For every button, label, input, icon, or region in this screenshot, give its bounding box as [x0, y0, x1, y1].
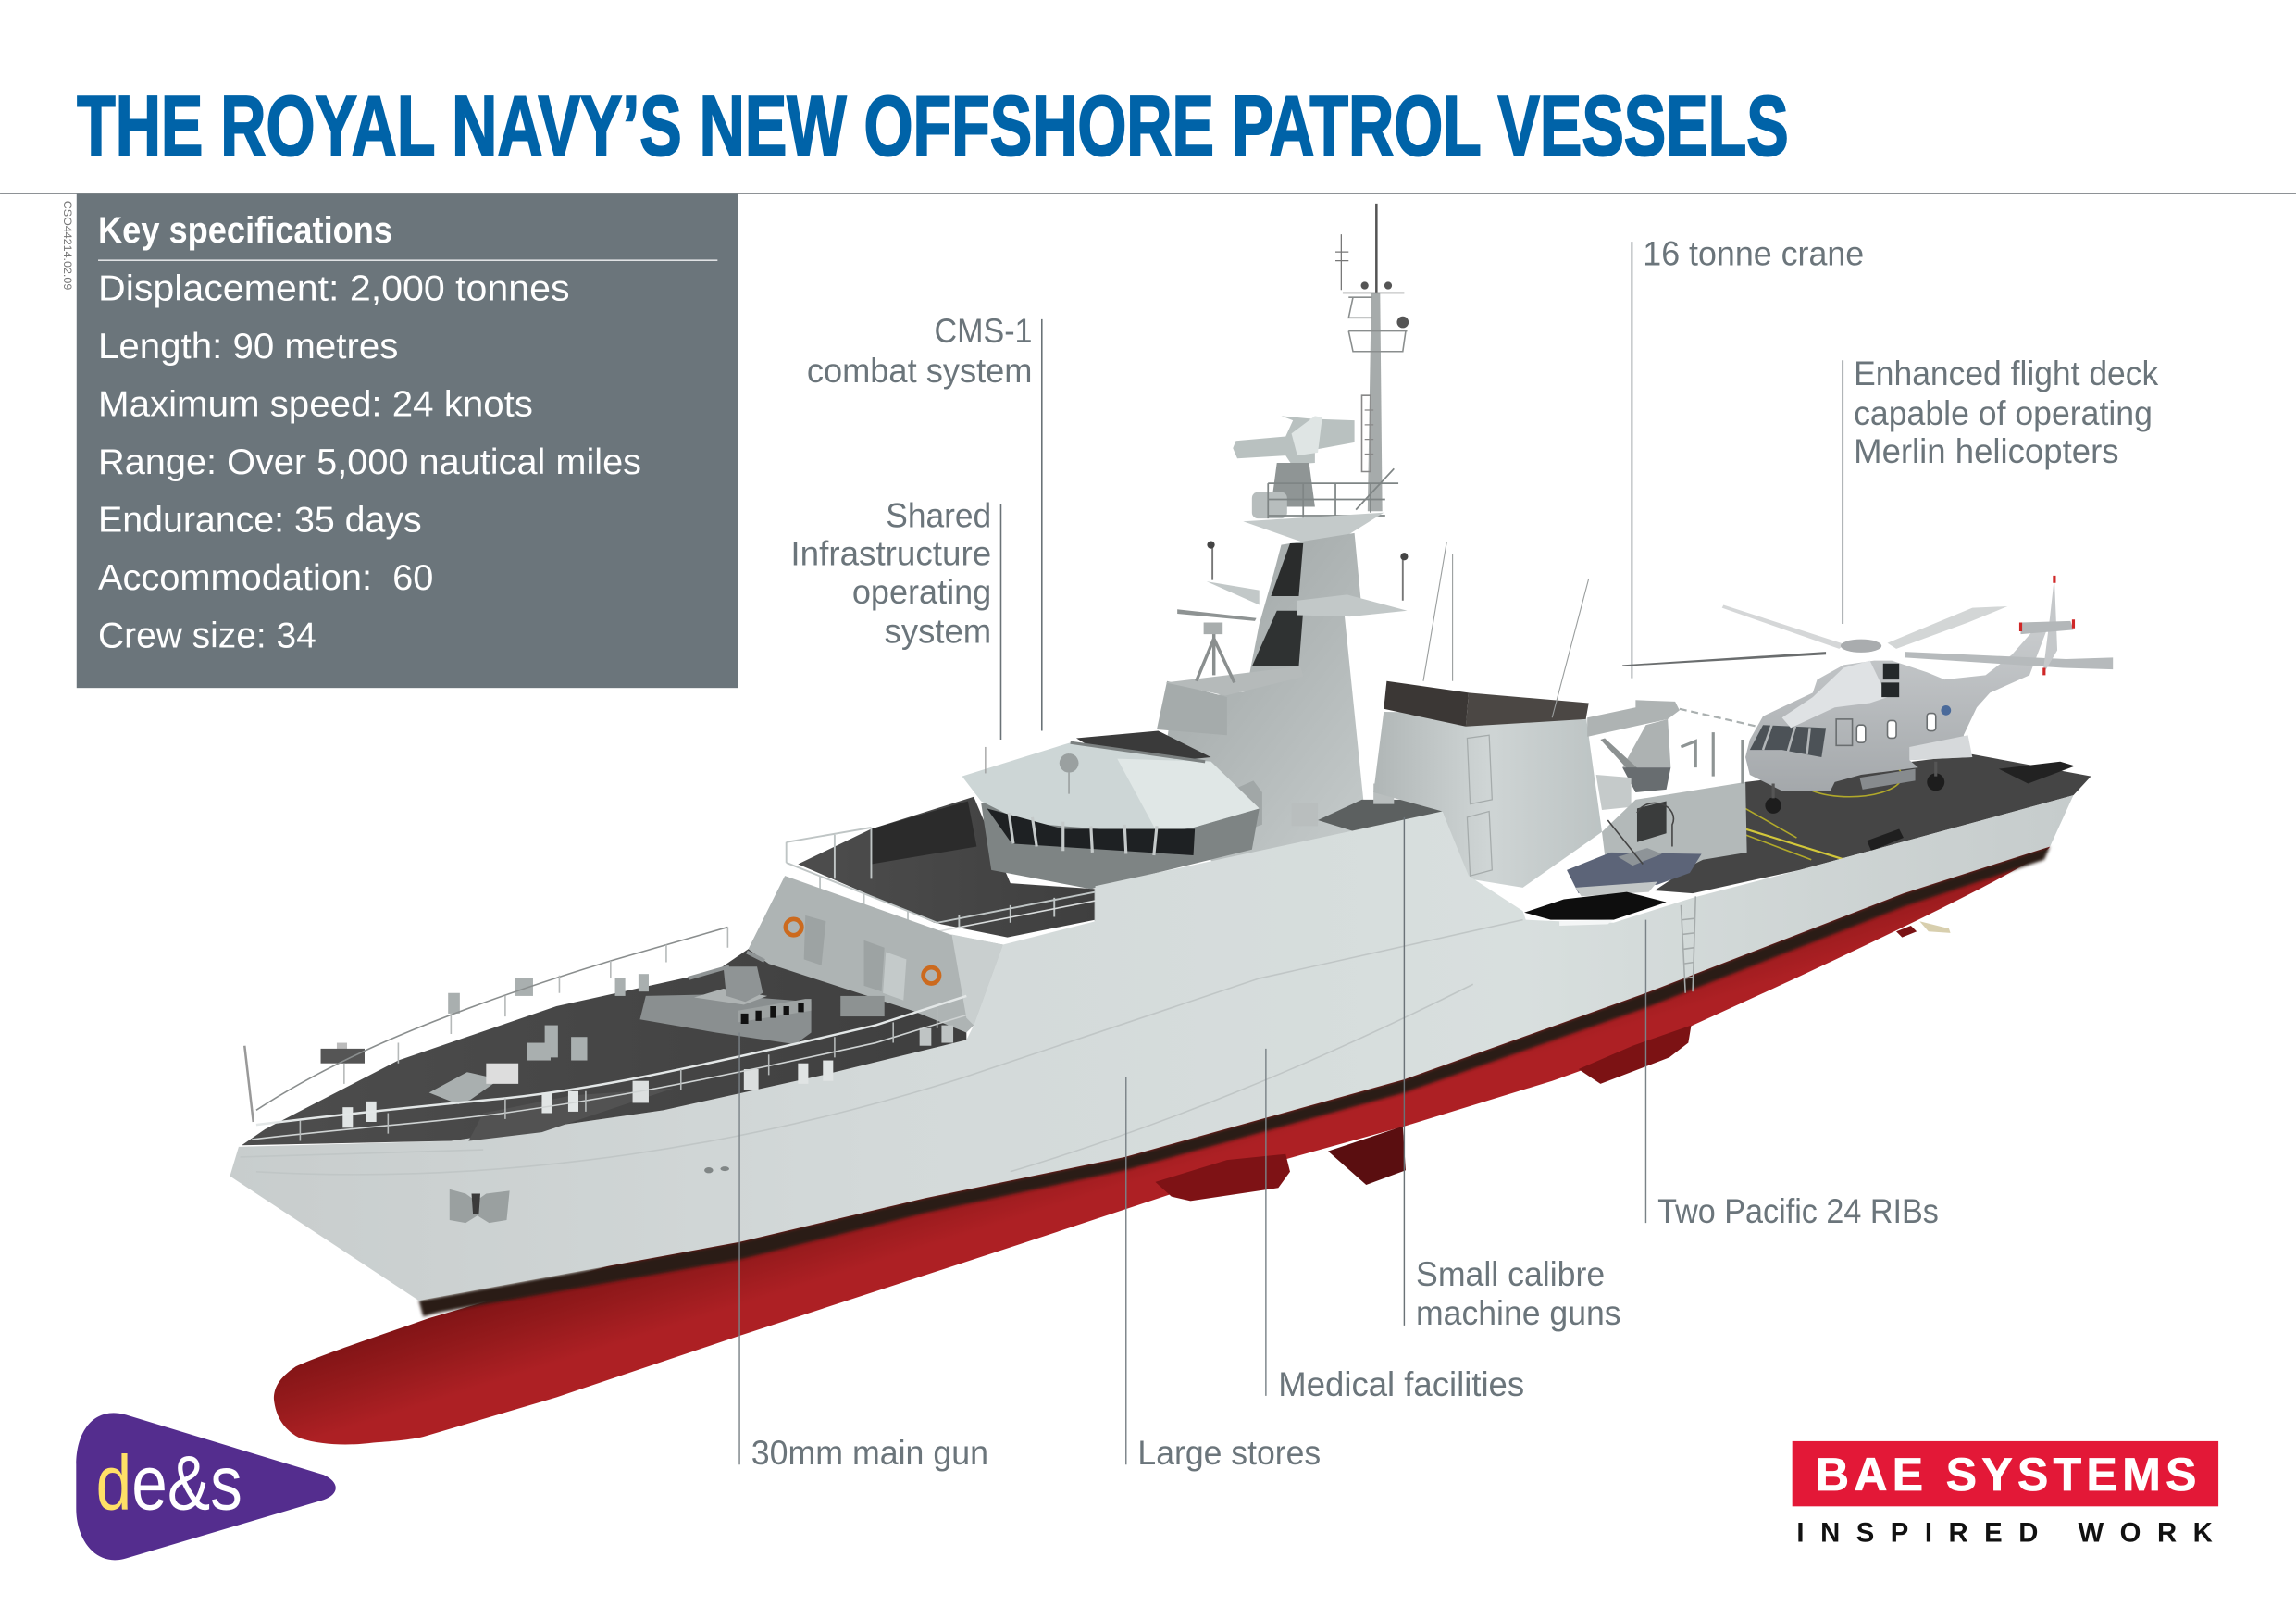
specifications heading: Key specifications — [98, 210, 392, 251]
spec list — [98, 268, 641, 655]
leader line and label: two Pacific 24 RIBs: Two Pacific 24 RIBs — [1657, 1191, 1939, 1230]
deck railings — [244, 928, 966, 1141]
leader line and label: 16 tonne crane: 16 tonne crane — [1643, 233, 1864, 272]
leader line and label: shared infrastructure operating system: system — [885, 612, 991, 651]
panel: key specifications — [77, 193, 738, 688]
ship illustration — [230, 204, 2113, 1444]
spec list: Length: 90 metres — [98, 327, 398, 367]
leader line and label: large stores: Large stores — [1137, 1433, 1321, 1472]
leader line and label: medical facilities: Medical facilities — [1278, 1364, 1524, 1403]
navigation radar — [1177, 609, 1257, 621]
leader line and label: small calibre machine guns: machine guns — [1416, 1293, 1621, 1332]
RIB boat — [1524, 803, 1702, 920]
leader line and label: CMS-1 combat system — [807, 311, 1042, 731]
logo: de&s — [76, 1413, 336, 1560]
mast and radar — [1233, 204, 1409, 542]
foredeck — [242, 928, 966, 1145]
tail rotor — [2042, 577, 2057, 675]
leader line and label: enhanced flight deck: capable of operating — [1854, 393, 2153, 432]
bridge deck — [787, 797, 1096, 938]
leader line and label: shared infrastructure operating system: Shared — [886, 496, 991, 535]
bridge superstructure — [962, 731, 1260, 889]
leader line and label: CMS-1 combat system: combat system — [807, 351, 1033, 390]
deck fittings — [321, 974, 953, 1127]
logo: BAE Systems — [1793, 1441, 2218, 1548]
logo: de&s: de&s — [96, 1438, 242, 1526]
crane — [1587, 700, 1782, 810]
leader line and label: shared infrastructure operating system: Infrastructure — [790, 534, 991, 573]
spec list: Endurance: 35 days — [98, 500, 422, 540]
lifebuoys — [786, 919, 801, 935]
anchor recess — [450, 1189, 510, 1223]
hangar block — [1373, 542, 1602, 888]
rotor blades — [1722, 604, 1845, 649]
funnel tower — [1157, 533, 1453, 918]
leader line and label: 30mm main gun: 30mm main gun — [751, 1433, 988, 1472]
flight deck — [1655, 754, 2091, 893]
leader line and label: shared infrastructure operating system: operating — [852, 572, 991, 611]
red lower hull — [274, 847, 2050, 1444]
leader line and label: enhanced flight deck — [1843, 354, 2159, 624]
leader line and label: enhanced flight deck: Enhanced flight deck — [1854, 354, 2159, 392]
leader line and label: small calibre machine guns — [1404, 817, 1621, 1332]
logo: BAE Systems: BAE SYSTEMS — [1816, 1449, 2196, 1501]
main gun mount — [639, 952, 812, 1044]
spec list: Range: Over 5,000 nautical miles — [98, 442, 641, 482]
aft deckhouse — [1602, 732, 1747, 885]
leader line and label: small calibre machine guns: Small calibre — [1416, 1254, 1605, 1293]
waterline stripe — [419, 847, 2050, 1316]
spec list: Displacement: 2,000 tonnes — [98, 268, 570, 308]
deck equipment behind wall — [1318, 800, 1444, 832]
document code: CSO44214.02.09 — [61, 201, 74, 291]
leader line and label: enhanced flight deck: Merlin helicopters — [1854, 431, 2119, 470]
spec list: Maximum speed: 24 knots — [98, 384, 533, 424]
leader line and label: shared infrastructure operating system — [790, 496, 1000, 740]
superstructure front wall — [749, 876, 1003, 1032]
radar array — [1233, 416, 1355, 465]
ladder — [1681, 896, 1695, 993]
grey hull — [230, 795, 2073, 1301]
stabiliser fins — [1155, 1154, 1290, 1201]
spec list: Accommodation: 60 — [98, 558, 433, 598]
helicopter — [1622, 576, 2113, 814]
logo: BAE Systems: INSPIRED WORK — [1796, 1518, 2213, 1548]
leader line and label: CMS-1 combat system: CMS-1 — [934, 311, 1033, 350]
spec list: Crew size: 34 — [98, 616, 316, 655]
